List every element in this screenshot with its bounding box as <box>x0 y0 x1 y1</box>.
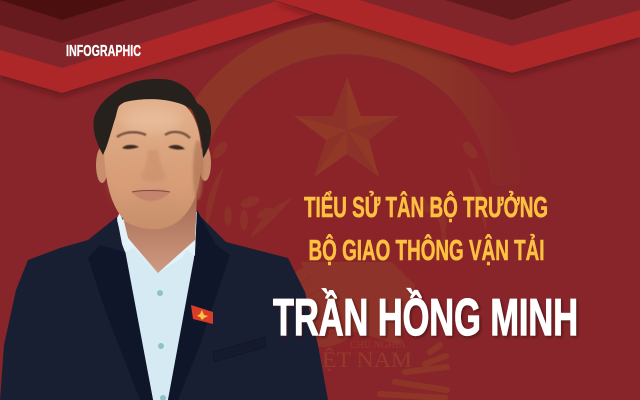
emblem star <box>294 77 399 177</box>
label: INFOGRAPHIC: INFOGRAPHIC <box>66 43 141 60</box>
nose <box>141 150 166 182</box>
shirt <box>117 212 197 400</box>
jacket <box>0 212 328 400</box>
face shading <box>113 108 203 200</box>
eyebrows <box>117 132 190 138</box>
shirt buttons <box>157 290 166 400</box>
ears <box>96 147 108 183</box>
collar <box>117 208 197 275</box>
eyes <box>122 145 185 150</box>
lapels <box>88 210 230 400</box>
emblem lettering: CHỦ NGHĨA <box>350 339 407 351</box>
ribbon: right chevron <box>274 0 640 77</box>
rice ears <box>206 139 486 265</box>
portrait of minister <box>0 79 328 400</box>
hair <box>93 79 211 158</box>
emblem watermark <box>163 21 527 398</box>
emblem gear <box>280 262 415 347</box>
mouth <box>132 189 170 201</box>
pocket <box>213 337 266 362</box>
neck <box>118 195 197 273</box>
heading: subtitle <box>304 190 548 267</box>
lapel pin <box>191 305 213 324</box>
emblem ribbon <box>380 345 447 398</box>
ribbon: left chevron <box>0 0 316 97</box>
emblem lettering: ỆT NAM <box>322 347 412 372</box>
face <box>104 96 201 229</box>
